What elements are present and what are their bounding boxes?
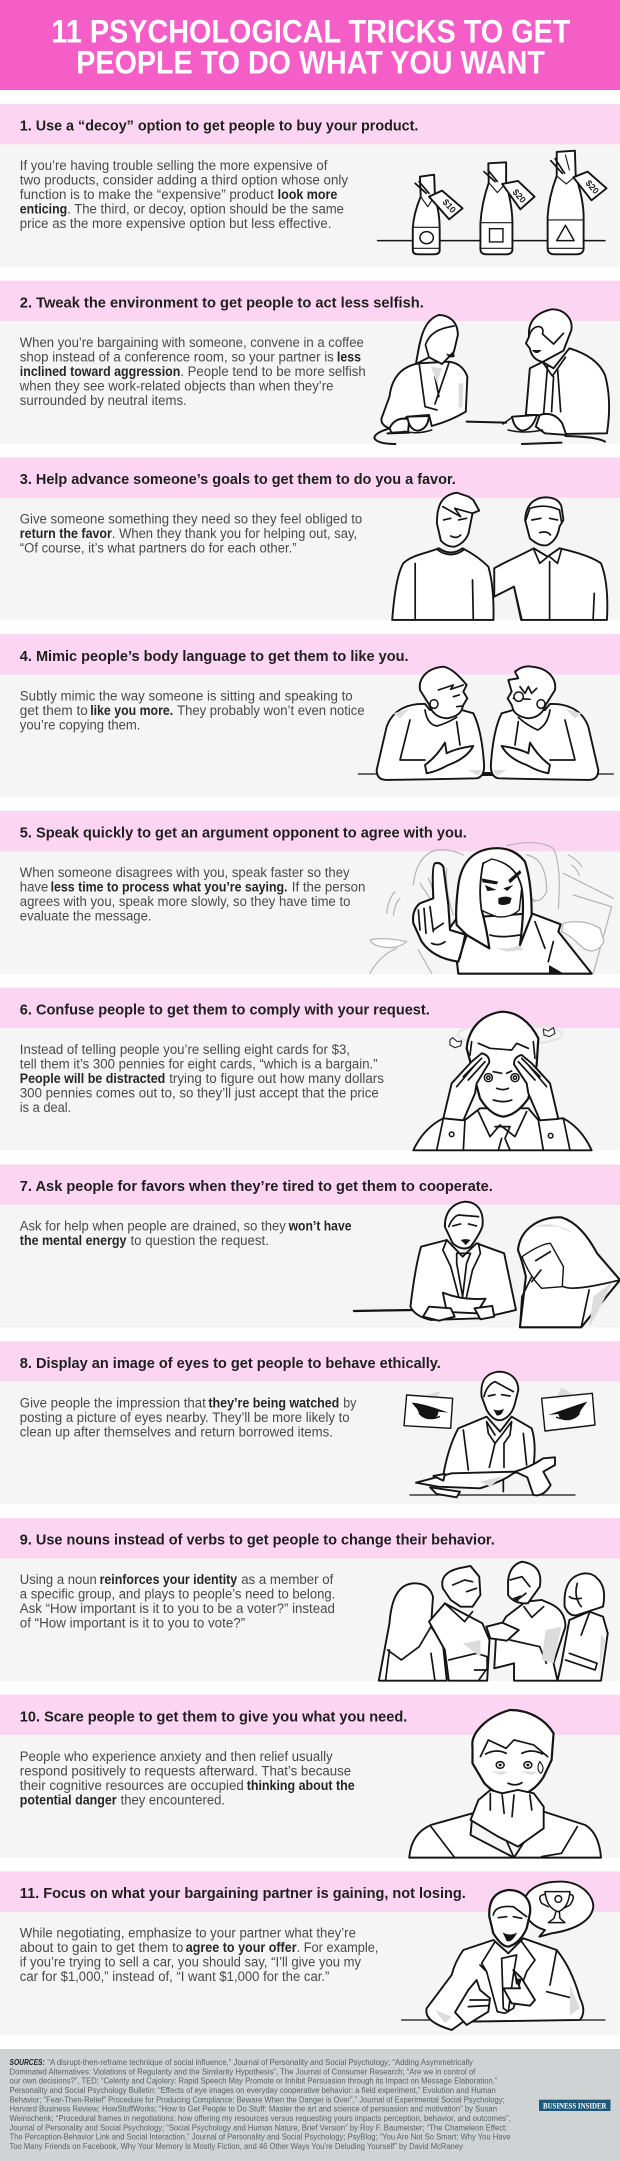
- text block 9: Ask “How important is it to you to be a voter?” instead: [20, 1601, 335, 1616]
- text block 4: get them to: [20, 703, 88, 718]
- heading 9: 9. Use nouns instead of verbs to get people to change their behavior.: [20, 1533, 495, 1549]
- text block 5: If the person: [292, 880, 365, 894]
- sources text: Dominated Alternatives: Violations of Regularity and the Similarity Hypothesis”, The Journal of Consumer Research; “Are we in control of: [10, 2066, 476, 2076]
- text block 9: as a member of: [241, 1572, 334, 1587]
- text block 10: respond positively to requests afterward. That’s because: [20, 1763, 351, 1778]
- sources text: SOURCES:: [10, 2057, 45, 2067]
- illustration: man with paper beside tired woman: [354, 1202, 620, 1327]
- text block 6: Instead of telling people you’re selling eight cards for $3,: [20, 1042, 350, 1057]
- panel: trick 1: [0, 104, 620, 267]
- panel: trick 6: [0, 988, 620, 1151]
- text block 7: Ask for help when people are drained, so they: [20, 1218, 286, 1234]
- sources text: our own decisions?”, TED; “Celerity and Cajolery: Rapid Speech May Promote or Inhibit Persuasion through its Impact on Message Elaboration,”: [10, 2076, 498, 2086]
- heading 3: 3. Help advance someone’s goals to get them to do you a favor.: [20, 472, 456, 488]
- sources text: Too Many Friends on Facebook, Why Your Memory Is Mostly Fiction, and 46 Other Ways You’re Deluding Yourself” by David McRaney: [10, 2141, 464, 2151]
- text block 9: a specific group, and plays to people’s need to belong.: [20, 1586, 335, 1602]
- heading 6: 6. Confuse people to get them to comply with your request.: [20, 1002, 430, 1018]
- text block 2: inclined toward aggression: [20, 364, 180, 379]
- panel: trick 2: [0, 281, 620, 444]
- title: PEOPLE TO DO WHAT YOU WANT: [76, 44, 545, 80]
- text block 5: evaluate the message.: [20, 908, 151, 924]
- panel: trick 5: [0, 811, 620, 974]
- sources text: Harvard Business Review; HowStuffWorks; “How to Get People to Do Stuff: Master the art and science of persuasion and motivation” by Susan: [10, 2104, 497, 2114]
- panel: trick 7: [0, 1164, 620, 1328]
- text block 8: [20, 1395, 357, 1439]
- text block 2: shop instead of a conference room, so your partner is: [20, 349, 334, 364]
- heading 5: 5. Speak quickly to get an argument opponent to agree with you.: [20, 826, 467, 842]
- heading 7: 7. Ask people for favors when they’re tired to get them to cooperate.: [20, 1179, 493, 1195]
- text block 1: two products, consider adding a third option whose only: [20, 172, 348, 188]
- text block 11: if you’re trying to sell a car, you should say, “I’ll give you my: [20, 1954, 361, 1970]
- text block 3: “Of course, it’s what partners do for each other.”: [20, 540, 297, 556]
- text block 1: enticing: [20, 202, 67, 216]
- text block 11: agree to your offer: [186, 1940, 297, 1955]
- panel: trick 9: [0, 1518, 620, 1681]
- text block 11: car for $1,000,” instead of, “I want $1,000 for the car.”: [20, 1969, 329, 1984]
- text block 7: won’t have: [288, 1218, 352, 1234]
- text block 6: People will be distracted: [20, 1071, 165, 1086]
- text block 11: about to gain to get them to: [20, 1940, 183, 1955]
- text block 1: [20, 158, 348, 231]
- text block 4: you’re copying them.: [20, 717, 140, 732]
- heading 4: 4. Mimic people’s body language to get them to like you.: [20, 649, 409, 665]
- text block 10: People who experience anxiety and then relief usually: [20, 1749, 333, 1764]
- text block 7: to question the request.: [130, 1233, 269, 1248]
- illustration: two people mirroring gestures at a table: [358, 666, 613, 780]
- text block 9: reinforces your identity: [100, 1572, 238, 1587]
- title: [51, 14, 571, 80]
- text block 2: surrounded by neutral items.: [20, 393, 187, 408]
- text block 7: the mental energy: [20, 1233, 127, 1248]
- text block 4: like you more.: [90, 703, 173, 718]
- text block 2: When you’re bargaining with someone, convene in a coffee: [20, 335, 364, 350]
- text block 10: their cognitive resources are occupied: [20, 1778, 244, 1793]
- text block 2: . People tend to be more selfish: [180, 364, 366, 379]
- panel: trick 10: [0, 1695, 620, 1858]
- price tag labels: $20: [510, 187, 528, 205]
- heading 1: 1. Use a “decoy” option to get people to buy your product.: [20, 119, 418, 135]
- text block 9: of “How important is it to you to vote?”: [20, 1616, 245, 1630]
- sources text: Journal of Personality and Social Psychology; “Social Psychology and Human Nature, Brief Version” by Roy F. Baumeister; “The Chameleon Effect:: [10, 2122, 507, 2132]
- illustration: woman and man at a coffee table: [374, 309, 609, 444]
- heading 8: 8. Display an image of eyes to get people to behave ethically.: [20, 1356, 441, 1372]
- sources text: Behavior; “Fear-Then-Relief” Procedure for Producing Compliance: Beware When the Danger is Over”,” Journal of Experimental Social Psychology;: [10, 2094, 505, 2104]
- heading 10: 10. Scare people to get them to give you what you need.: [20, 1709, 407, 1725]
- panel: trick 3: [0, 458, 620, 620]
- text block 3: . When they thank you for helping out, say,: [112, 526, 357, 541]
- text block 10: potential danger: [20, 1792, 117, 1807]
- title: 11 PSYCHOLOGICAL TRICKS TO GET: [51, 14, 571, 50]
- logo: Business Insider: BUSINESS INSIDER: [543, 2101, 607, 2111]
- price tag labels: $10: [440, 197, 458, 215]
- text block 5: have: [20, 880, 48, 894]
- illustration: man holding a tablet between two eye posters: [404, 1372, 595, 1497]
- price tag labels: [440, 178, 601, 215]
- text block 8: Give people the impression that: [20, 1395, 206, 1410]
- text block 3: Give someone something they need so they feel obliged to: [20, 512, 362, 526]
- text block 5: When someone disagrees with you, speak faster so they: [20, 865, 350, 880]
- text block 1: If you’re having trouble selling the more expensive of: [20, 158, 328, 173]
- text block 4: They probably won’t even notice: [177, 703, 365, 718]
- text block 8: posting a picture of eyes nearby. They’ll be more likely to: [20, 1410, 350, 1425]
- text block 6: [20, 1042, 384, 1115]
- sources text: [10, 2057, 511, 2151]
- sources text: Personality and Social Psychology Bulletin; “Effects of eye images on everyday cooperative behavior: a field experiment,” Evolution and Human: [10, 2085, 496, 2095]
- speech bubble with trophy: [523, 1882, 593, 1937]
- panel: trick 8: [0, 1341, 620, 1504]
- text block 10: they encountered.: [121, 1792, 225, 1807]
- text block 2: less: [337, 349, 361, 364]
- header banner: [0, 0, 620, 90]
- text block 10: [20, 1749, 355, 1807]
- text block 7: [20, 1218, 352, 1248]
- text block 4: [20, 688, 365, 732]
- text block 1: function is to make the “expensive” product: [20, 187, 274, 202]
- sources text: “A disrupt-then-reframe technique of social influence,” Journal of Personality and Social Psychology; “Adding Asymmetrically: [47, 2057, 474, 2067]
- text block 8: they’re being watched: [208, 1395, 339, 1410]
- text block 2: when they see work-related objects than when they’re: [19, 378, 333, 393]
- illustration: three bottles with price tags: [378, 151, 607, 254]
- illustration: anxious man biting his nails: [409, 1710, 601, 1858]
- text block 6: trying to figure out how many dollars: [169, 1071, 384, 1086]
- text block 3: [20, 512, 362, 556]
- text block 11: While negotiating, emphasize to your partner what they’re: [20, 1926, 356, 1940]
- price tag labels: $20: [583, 178, 601, 196]
- panel: trick 4: [0, 634, 620, 797]
- illustration: two men, one with arm around the other: [392, 493, 607, 620]
- text block 5: [20, 865, 365, 924]
- text block 11: [20, 1926, 378, 1984]
- text block 5: less time to process what you’re saying.: [51, 880, 287, 894]
- illustration: group of four people talking: [379, 1562, 608, 1681]
- text block 6: is a deal.: [20, 1100, 71, 1115]
- illustration: woman raising a finger with faded figures behind: [370, 843, 613, 974]
- panel: sources footer: [0, 2049, 620, 2161]
- text block 6: 300 pennies comes out to, so they’ll just accept that the price: [20, 1085, 379, 1100]
- text block 11: . For example,: [297, 1940, 378, 1955]
- illustration: man in suit with trophy thought bubble: [402, 1882, 605, 2030]
- text block 1: price as the more expensive option but less effective.: [20, 216, 331, 231]
- text block 8: by: [343, 1395, 357, 1410]
- heading 2: 2. Tweak the environment to get people to act less selfish.: [20, 295, 424, 311]
- panel: trick 11: [0, 1872, 620, 2035]
- heading 11: 11. Focus on what your bargaining partner is gaining, not losing.: [20, 1886, 466, 1902]
- text block 9: Using a noun: [20, 1572, 97, 1587]
- text block 10: thinking about the: [247, 1778, 355, 1793]
- text block 1: . The third, or decoy, option should be the same: [67, 202, 344, 216]
- text block 1: look more: [278, 187, 338, 202]
- text block 5: agrees with you, speak more slowly, so they have time to: [20, 894, 350, 909]
- text block 3: return the favor: [20, 526, 113, 541]
- text block 4: Subtly mimic the way someone is sitting and speaking to: [20, 688, 353, 703]
- text block 9: [20, 1572, 335, 1630]
- sources text: The Perception-Behavior Link and Social Interaction,” Journal of Personality and Social Psychology; PsyBlog; “You Are Not So Smart: Why You Have: [10, 2132, 511, 2142]
- text block 8: clean up after themselves and return borrowed items.: [20, 1424, 333, 1439]
- text block 2: [19, 335, 366, 408]
- sources text: Weinschenk; “Procedural frames in negotiations: how offering my resources versus requesting yours impacts perception, behavior, and outcomes”,: [10, 2113, 511, 2123]
- text block 6: tell them it’s 300 pennies for eight cards, “which is a bargain.”: [20, 1056, 378, 1071]
- illustration: confused man rubbing his temples: [413, 1012, 592, 1150]
